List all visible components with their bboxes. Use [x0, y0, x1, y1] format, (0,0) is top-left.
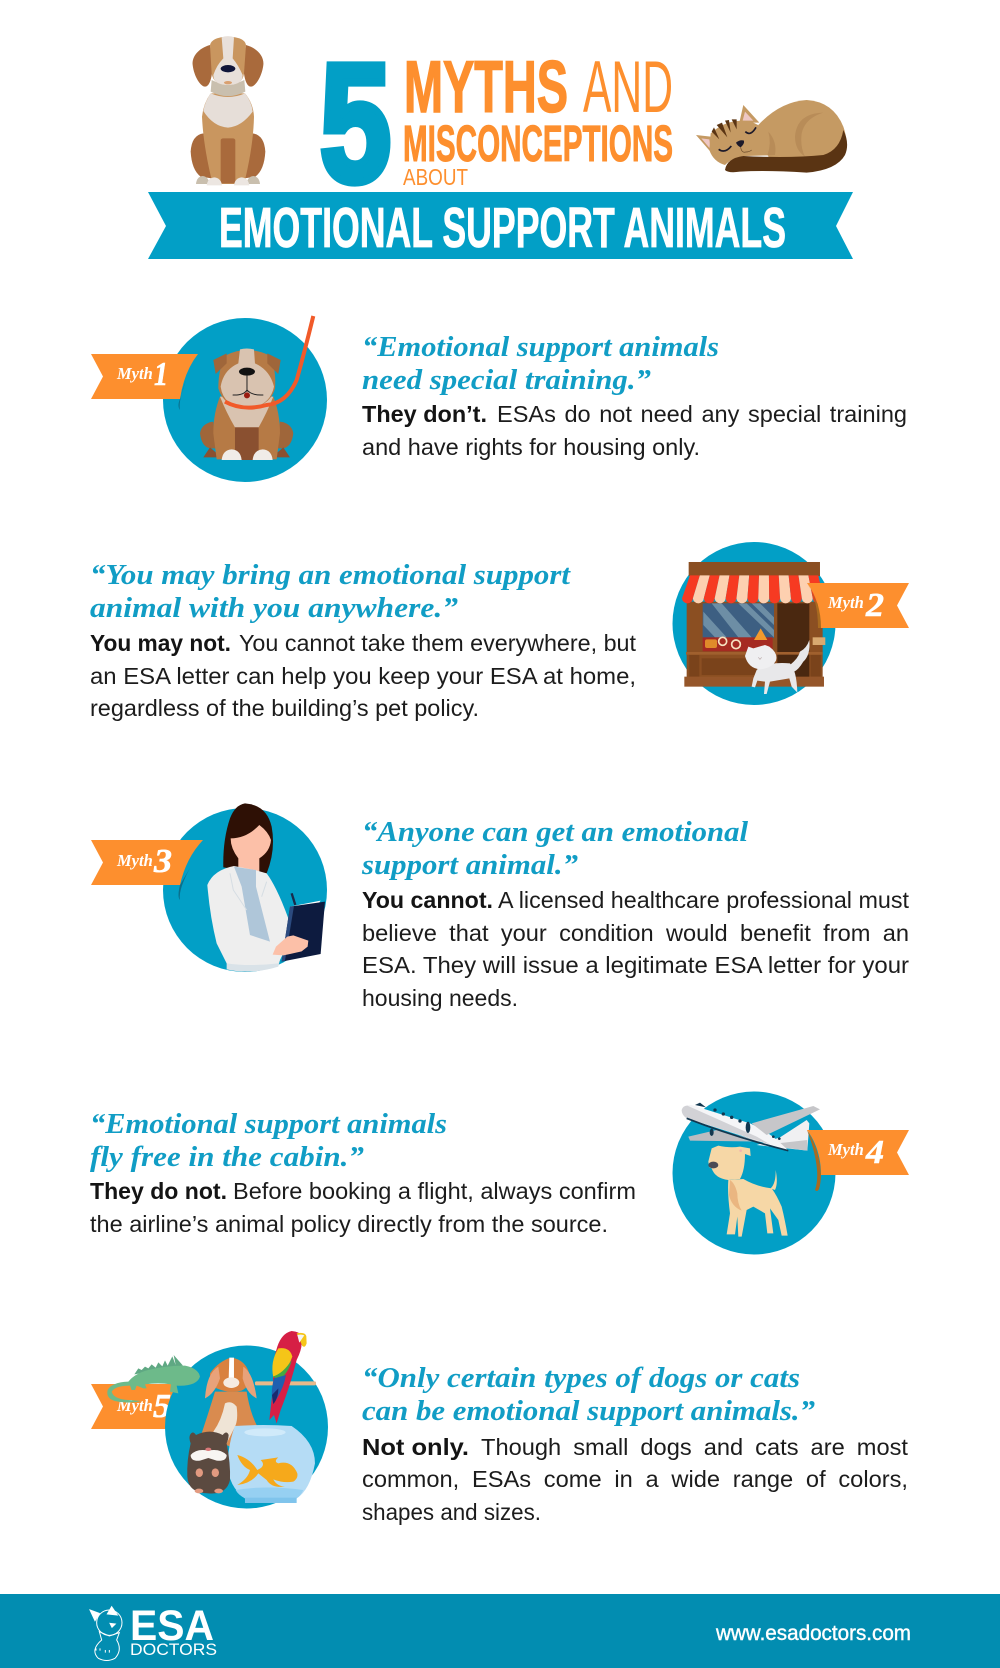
footer — [0, 1594, 1000, 1668]
logo icon — [90, 1607, 122, 1660]
logo subtitle: DOCTORS — [130, 1640, 217, 1659]
panel: myth 3 — [91, 803, 910, 1011]
ribbon: myth 5 — [91, 1384, 192, 1429]
myth 1 body: ESAs do not need any special training — [497, 401, 907, 427]
myth 2 body — [90, 630, 637, 721]
myth 2 body: You cannot take them everywhere, but — [239, 630, 637, 656]
ribbon: myth 1 — [91, 354, 198, 410]
myth 2 body: You may not. — [90, 630, 231, 656]
myth 1 body — [362, 401, 907, 460]
myth 3 body — [362, 887, 910, 1011]
ribbon: myth 5: Myth — [116, 1396, 153, 1415]
myth 2 body: an ESA letter can help you keep your ESA at home, — [90, 663, 636, 689]
myth 4 heading — [90, 1109, 447, 1173]
title: 5: 5 — [320, 29, 391, 217]
myth 2 heading: “You may bring an emotional support — [90, 560, 571, 591]
myth 2 heading: animal with you anywhere.” — [90, 593, 458, 624]
myth 2 body: regardless of the building’s pet policy. — [90, 695, 479, 721]
ribbon: myth 1: 1 — [154, 356, 168, 393]
myth 5 heading — [362, 1363, 815, 1427]
circle illustration: assorted pets — [165, 1331, 328, 1508]
myth 3 heading: support animal.” — [361, 850, 578, 881]
circle illustration: doctor with clipboard — [163, 803, 327, 972]
ribbon: myth 2: Myth — [827, 593, 864, 612]
banner — [148, 192, 853, 260]
ribbon: myth 3: Myth — [116, 851, 153, 870]
title: myths: MYTHS — [404, 47, 568, 128]
myth 3 body: believe that your condition would benefit from an — [362, 920, 909, 946]
website url: www.esadoctors.com — [715, 1622, 911, 1645]
myth 4 body: the airline’s animal policy directly from the source. — [90, 1211, 608, 1237]
panel: myth 1 — [91, 316, 907, 482]
title: and: AND — [583, 47, 673, 128]
icon: sleeping cat — [696, 100, 847, 173]
myth 5 body: Not only. — [362, 1434, 469, 1460]
myth 3 body: You cannot. — [362, 887, 493, 913]
ribbon: myth 3 — [91, 840, 203, 900]
icon: sitting dog — [191, 36, 265, 185]
ribbon: myth 5: 5 — [153, 1388, 171, 1425]
myth 1 heading — [362, 332, 719, 396]
myth 3 body: ESA. They will issue a legitimate ESA letter for your — [362, 952, 909, 978]
circle illustration: dog on a leash — [163, 316, 327, 482]
myth 1 heading: need special training.” — [362, 365, 651, 396]
icon: iguana — [107, 1355, 200, 1403]
ribbon: myth 1: Myth — [116, 364, 153, 383]
header — [148, 29, 853, 260]
panel: myth 5 — [91, 1331, 909, 1525]
title: misconceptions: MISCONCEPTIONS — [403, 115, 673, 172]
ribbon: myth 4: 4 — [865, 1134, 884, 1171]
myth 5 body: Though small dogs and cats are most — [481, 1434, 909, 1460]
myth 5 heading: “Only certain types of dogs or cats — [362, 1363, 800, 1394]
circle illustration: storefront and cat — [672, 542, 836, 705]
ribbon: myth 2 — [807, 583, 909, 628]
ribbon: myth 3: 3 — [153, 843, 172, 880]
myth 5 body — [362, 1434, 909, 1525]
panel: myth 4 — [90, 1092, 909, 1254]
ribbon: myth 2: 2 — [865, 587, 884, 624]
ribbon: myth 4: Myth — [827, 1140, 864, 1159]
myth 3 heading — [361, 817, 748, 881]
myth 3 body: A licensed healthcare professional must — [498, 887, 910, 913]
logo wordmark: ESA — [130, 1602, 214, 1650]
myth 4 heading: “Emotional support animals — [90, 1109, 447, 1140]
myth 1 heading: “Emotional support animals — [362, 332, 719, 363]
myth 5 body: common, ESAs come in a wide range of colors, — [362, 1466, 908, 1492]
myth 4 heading: fly free in the cabin.” — [90, 1142, 364, 1173]
myth 4 body: They do not. — [90, 1178, 227, 1204]
myth 4 body — [90, 1178, 636, 1237]
myth 4 body: Before booking a flight, always confirm — [233, 1178, 636, 1204]
panel: myth 2 — [90, 542, 909, 721]
ribbon: myth 4 — [807, 1130, 909, 1191]
circle illustration: dog and airplane — [672, 1092, 836, 1254]
myth 3 heading: “Anyone can get an emotional — [362, 817, 748, 848]
title: about: ABOUT — [403, 164, 468, 190]
myth 1 body: They don’t. — [362, 401, 487, 427]
myth 2 heading — [90, 560, 571, 624]
myth 1 body: and have rights for housing only. — [362, 434, 700, 460]
myth 5 body: shapes and sizes. — [362, 1499, 541, 1525]
myth 5 heading: can be emotional support animals.” — [362, 1396, 815, 1427]
myth 3 body: housing needs. — [362, 985, 518, 1011]
